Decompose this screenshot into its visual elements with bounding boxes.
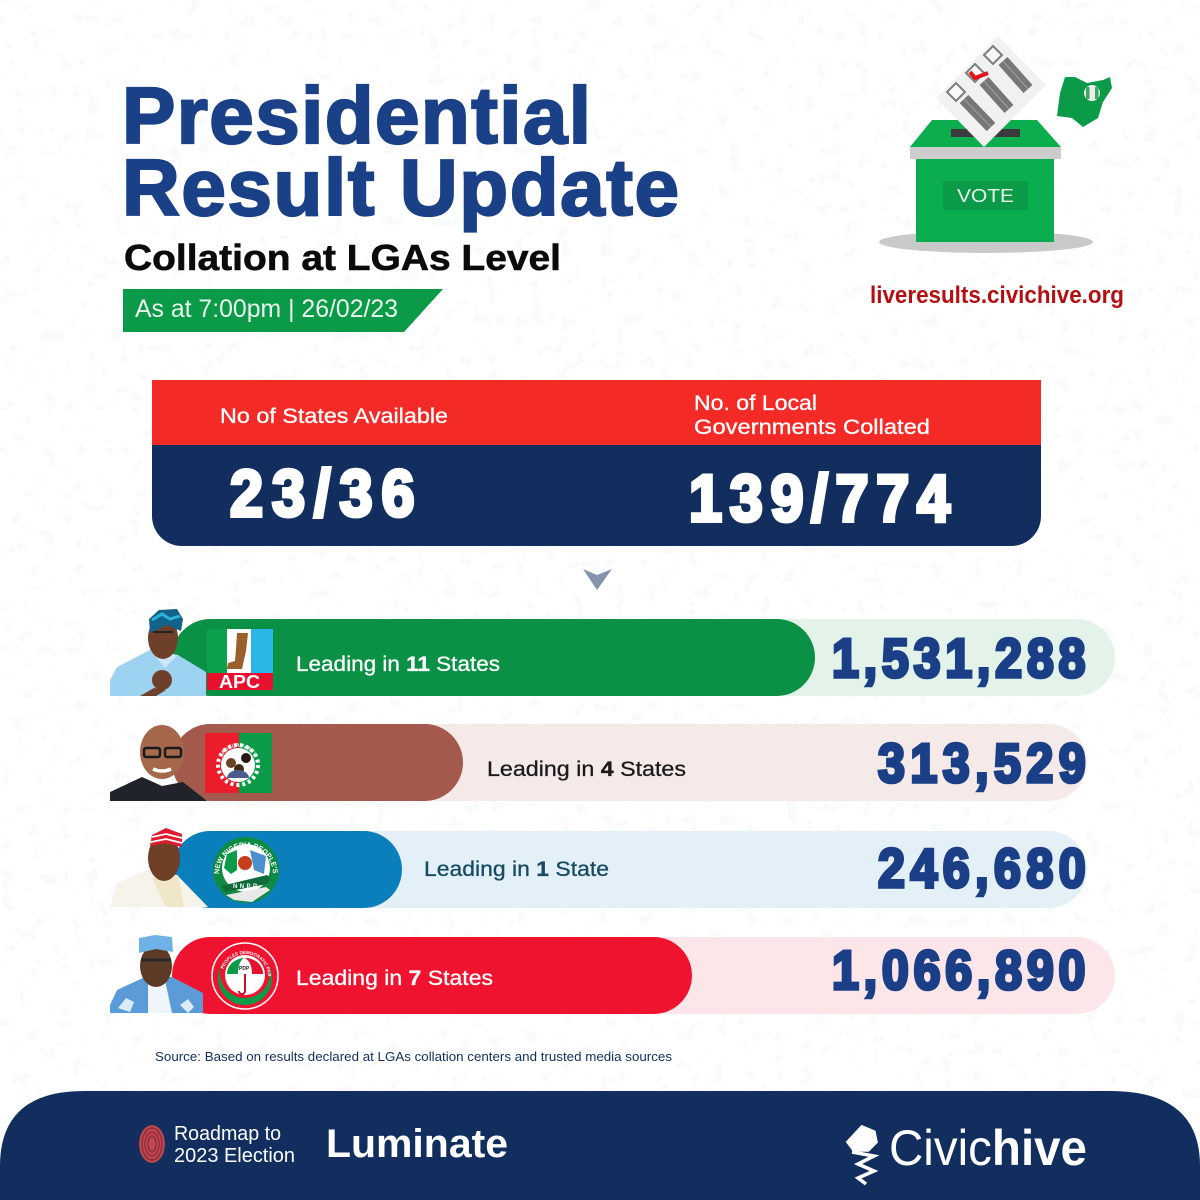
local governments label: [694, 391, 930, 439]
roadmap text: Roadmap to: [174, 1123, 281, 1145]
NNPP candidate portrait: [110, 828, 208, 907]
arrow: [583, 569, 612, 590]
APC label: Leading in 11 States: [296, 652, 500, 676]
NNPP logo: NEW NIGERIA PEOPLE'S PARTY: [214, 842, 278, 874]
PDP logo: [211, 942, 279, 1010]
title: Result Update: [122, 143, 679, 232]
APC logo: APC: [219, 672, 260, 692]
icon: Nigeria map: [1057, 77, 1112, 127]
Civichive logo: Civichive: [889, 1120, 1087, 1176]
footer: [0, 1091, 1200, 1200]
PDP logo: PDP: [239, 966, 250, 972]
title: [122, 71, 679, 232]
row: PDP: [110, 935, 1115, 1014]
LP logo: [205, 733, 272, 793]
local governments label: No. of Local: [694, 391, 817, 415]
APC votes: 1,531,288: [832, 627, 1085, 689]
ballot paper: [936, 36, 1046, 147]
APC candidate portrait: [110, 609, 206, 696]
title: Presidential: [122, 71, 591, 160]
website link: liveresults.civichive.org: [870, 282, 1124, 309]
date banner: As at 7:00pm | 26/02/23: [135, 295, 398, 323]
PDP logo: PEOPLES DEMOCRATIC PARTY: [220, 950, 271, 976]
states value: 23/36: [230, 457, 415, 531]
source note: Source: Based on results declared at LGAs collation centers and trusted media sources: [155, 1050, 672, 1064]
Luminate logo: Luminate: [326, 1122, 508, 1166]
NNPP logo: NNPP: [233, 884, 257, 890]
PDP label: Leading in 7 States: [296, 966, 493, 990]
PDP candidate portrait: [110, 935, 203, 1013]
row: NNPP: [110, 828, 1087, 908]
icon: ballot box: VOTE: [957, 185, 1014, 206]
NNPP logo: [213, 837, 279, 903]
row: LP: [110, 724, 1087, 801]
roadmap text: [174, 1123, 295, 1167]
date banner: [123, 289, 443, 332]
PDP votes: 1,066,890: [832, 939, 1085, 1001]
NNPP label: Leading in 1 State: [424, 857, 609, 881]
roadmap text: 2023 Election: [174, 1145, 295, 1167]
local governments value: 139/774: [689, 462, 950, 536]
LP votes: 313,529: [878, 732, 1086, 794]
local governments label: Governments Collated: [694, 415, 930, 439]
subtitle: Collation at LGAs Level: [124, 237, 561, 278]
states label: No of States Available: [220, 404, 448, 428]
LP label: Leading in 4 States: [487, 757, 686, 781]
LP candidate portrait: [110, 725, 207, 801]
row: APC: [110, 609, 1115, 696]
NNPP votes: 246,680: [878, 837, 1086, 899]
icon: ballot box: [879, 36, 1112, 253]
panel: totals: [152, 380, 1041, 546]
APC logo: [207, 629, 273, 692]
LP logo: LABOUR PARTY: [218, 744, 256, 757]
icon: fingerprint: [139, 1125, 165, 1163]
